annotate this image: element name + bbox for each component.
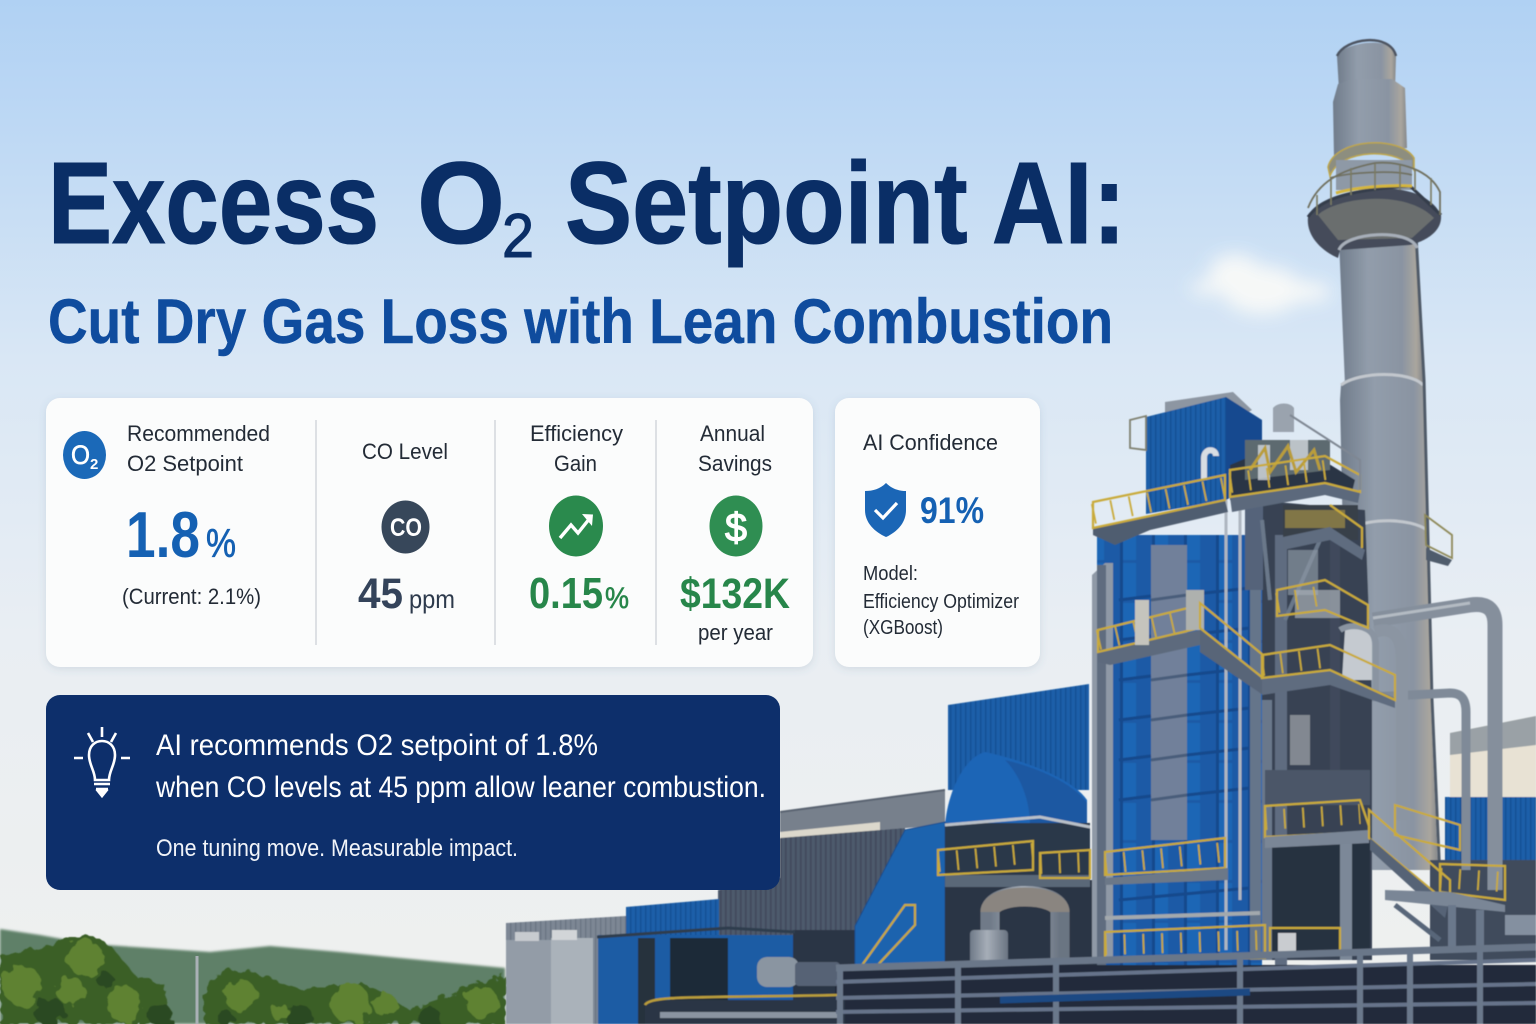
metric: annual savings: Savings [698,451,772,476]
left low buildings [506,899,863,1024]
metric: annual savings: per year [698,620,773,645]
icon: CO badge [382,500,430,554]
metric: annual savings [680,421,790,645]
platform A [1093,416,1228,545]
metric: CO level [358,439,455,618]
upper blue casing [1146,392,1294,514]
grey factory shed [718,790,945,935]
title: 2 [502,202,534,271]
metric: annual savings: $132K [680,570,790,618]
callout: AI recommendation: AI recommends O2 setpoint of 1.8% [156,729,598,762]
right side bracket platform [1425,515,1452,566]
icon: O2 badge: 2 [90,456,98,473]
utility pole [196,956,198,1024]
main blue boiler tower [1092,500,1262,965]
metric: recommended O2 setpoint: 1.8 [126,498,200,571]
metric: efficiency gain: Efficiency [530,421,623,446]
dome platform railing [938,841,1090,878]
panel: AI confidence: Model: [863,563,918,585]
callout: AI recommendation: One tuning move. Measurable impact. [156,835,518,862]
trees [0,934,505,1024]
icon: light bulb [74,727,130,796]
metric: recommended O2 setpoint: O2 Setpoint [127,451,243,476]
panel: AI confidence: (XGBoost) [863,617,943,639]
metric: CO level: ppm [409,584,455,614]
icon: trend arrow [549,496,603,556]
title: Setpoint AI: [565,138,1126,268]
metric: efficiency gain [529,421,629,618]
icon: O2 badge [63,431,106,479]
callout: AI recommendation: when CO levels at 45 ppm allow leaner combustion. [155,771,766,804]
mid platform rail [1105,838,1228,885]
metric: efficiency gain: 0.15 [529,569,603,618]
dark structure frame [1255,500,1372,960]
title: Excess [48,138,379,268]
back building right [1430,716,1536,960]
lower rails [860,905,1340,968]
icon: shield [865,483,906,537]
lower right platforms and stairs [1262,700,1536,960]
panel: metrics [46,398,813,667]
dome housing [945,752,1090,887]
panel: AI confidence: 91% [920,490,984,531]
metric: recommended O2 setpoint: (Current: 2.1%) [122,584,261,609]
upper structure frame [1245,500,1376,965]
platform D with stairs [1098,580,1395,708]
title [48,138,1126,271]
metric: recommended O2 setpoint: Recommended [127,421,270,446]
icon: CO badge: CO [390,514,422,542]
pipe rack [645,947,1536,1024]
icon: dollar badge: $ [725,506,747,550]
dark under-structure [945,880,1100,965]
icon: dollar badge [710,496,762,556]
metric: efficiency gain: % [605,582,629,615]
panel: AI confidence [835,398,1040,667]
metric: CO level: CO Level [362,439,448,464]
icon: O2 badge: O [71,440,90,470]
panel: AI confidence: AI Confidence [863,430,998,455]
metric: annual savings: Annual [700,421,765,446]
chimney stack [1328,40,1440,880]
industrial plant [506,40,1536,1024]
metric: CO level: 45 [358,570,403,618]
platform C [1283,505,1365,560]
metric: recommended O2 setpoint [63,421,270,609]
subtitle: Cut Dry Gas Loss with Lean Combustion [48,287,1113,357]
title: O [417,138,505,268]
metric: efficiency gain: Gain [554,451,597,476]
back blue wall [948,684,1089,790]
chimney platform [1308,163,1441,258]
panel: AI confidence: Efficiency Optimizer [863,591,1019,613]
cloud [1190,254,1331,314]
blue slanted duct [855,822,945,970]
side pipes [1370,603,1495,890]
platform B with machinery [1230,415,1360,512]
pipe elbow [970,896,1060,1024]
distant hills [0,929,505,1024]
callout: AI recommendation [46,695,780,890]
metric: recommended O2 setpoint: % [206,522,236,566]
